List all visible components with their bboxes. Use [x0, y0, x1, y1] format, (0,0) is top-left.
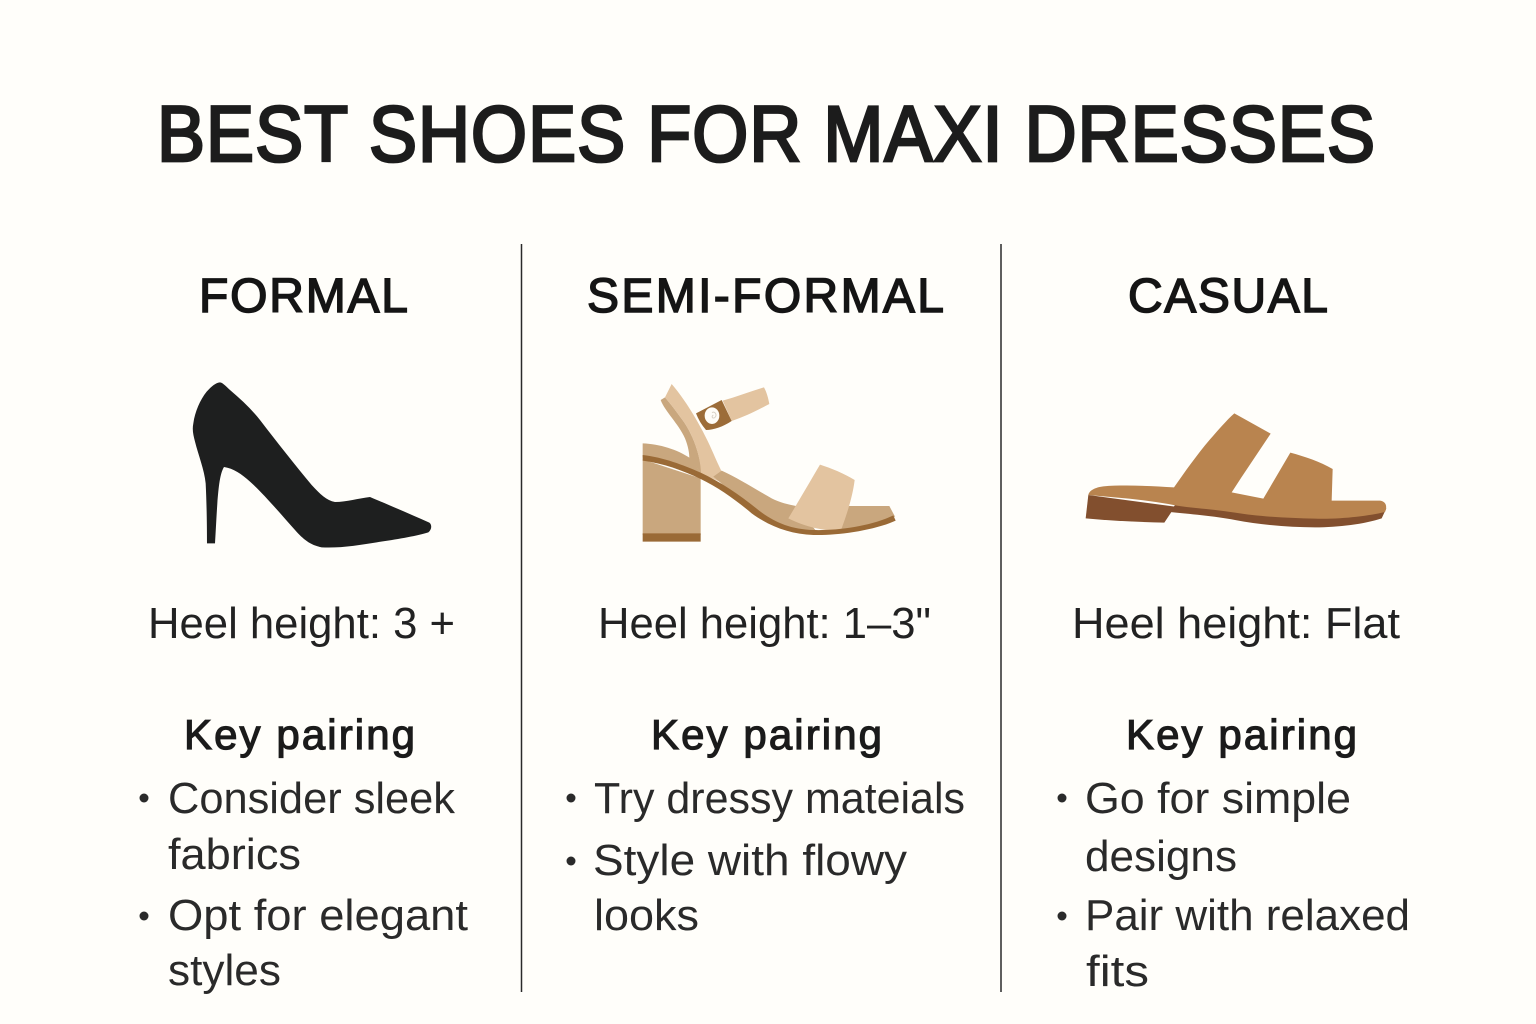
- title: BEST SHOES FOR MAXI DRESSES: [157, 90, 1375, 178]
- heading: casual: CASUAL: [1128, 270, 1328, 323]
- bullet list: formal: Consider sleek: [168, 774, 456, 823]
- heading: formal: FORMAL: [199, 270, 408, 323]
- bullet list: casual: Pair with relaxed: [1085, 891, 1410, 940]
- bullet list: semi-formal: looks: [594, 891, 699, 940]
- heading: semi-formal: SEMI-FORMAL: [587, 270, 944, 323]
- icon: black stiletto pump: [193, 382, 431, 548]
- bullet list: casual: Go for simple: [1085, 774, 1351, 823]
- bullet list: casual: fits: [1086, 947, 1149, 996]
- bullet list: formal: fabrics: [168, 830, 301, 879]
- heel height: semi-formal: Heel height: 1–3": [598, 599, 931, 648]
- panel: formal: [140, 270, 468, 995]
- icon: tan flat slide sandal: [1086, 413, 1386, 527]
- key pairing heading: formal: Key pairing: [184, 711, 415, 758]
- bullet list: casual: [1058, 774, 1410, 996]
- heel height: formal: Heel height: 3 +: [148, 599, 455, 648]
- panel: casual: [1058, 270, 1410, 996]
- bullet list: semi-formal: [566, 774, 965, 940]
- panel: semi-formal: [566, 270, 965, 940]
- key pairing heading: casual: Key pairing: [1126, 711, 1357, 758]
- bullet list: casual: designs: [1085, 832, 1237, 881]
- bullet list: semi-formal: Try dressy mateials: [594, 774, 965, 823]
- bullet list: formal: Opt for elegant: [168, 891, 468, 940]
- bullet list: formal: styles: [168, 946, 281, 995]
- heel height: casual: Heel height: Flat: [1072, 599, 1400, 648]
- bullet list: formal: [140, 774, 468, 995]
- icon: tan block-heel sandal: [643, 384, 896, 542]
- key pairing heading: semi-formal: Key pairing: [651, 711, 882, 758]
- bullet list: semi-formal: Style with flowy: [593, 836, 907, 885]
